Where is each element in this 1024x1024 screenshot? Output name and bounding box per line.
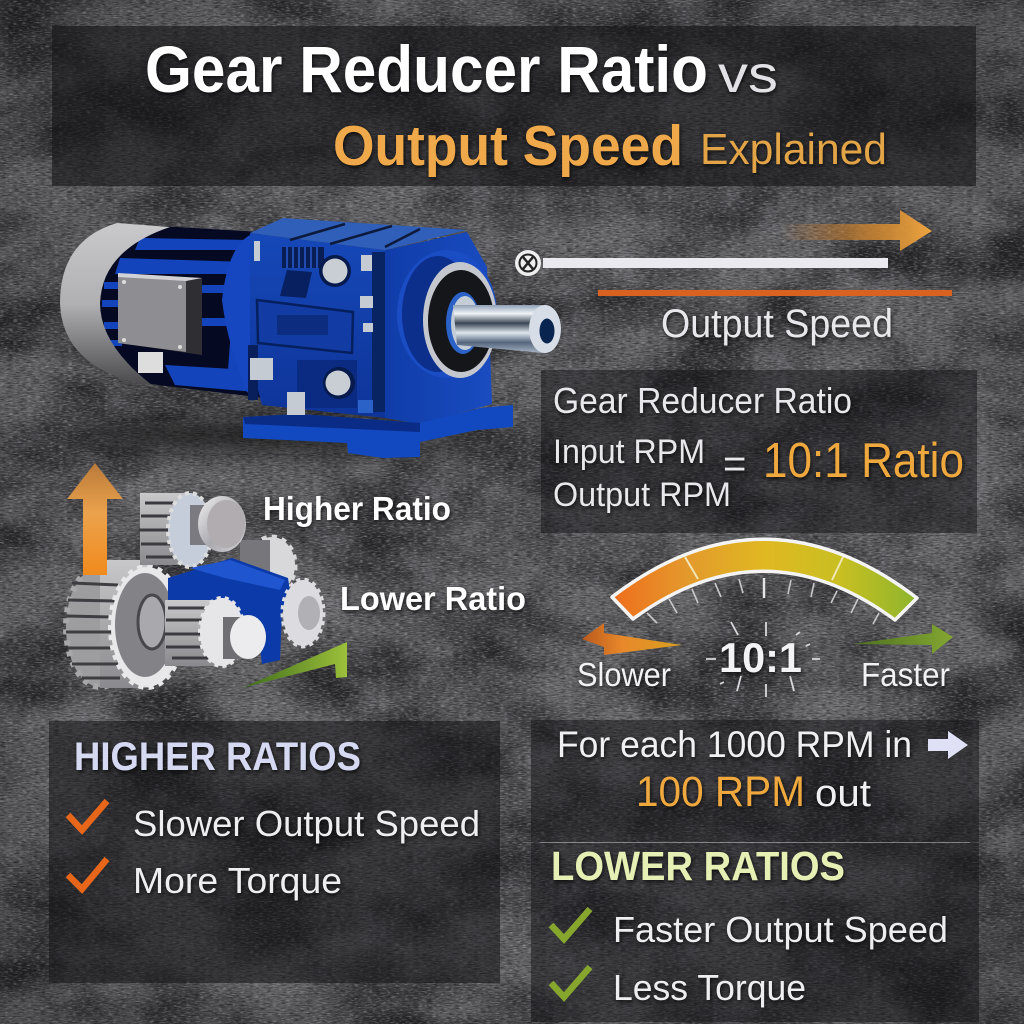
output flange: [397, 250, 497, 378]
text: faster output speed: Faster Output Speed: [613, 909, 948, 950]
front gear: [165, 598, 266, 666]
icon: orange check: [68, 859, 107, 889]
text: slower output speed: Slower Output Speed: [133, 803, 480, 844]
value: 10:1 ratio: 10:1 Ratio: [763, 434, 964, 488]
silver fan cover: [60, 223, 170, 385]
right gear: [283, 580, 323, 646]
heading: gear reducer ratio: Gear Reducer Ratio: [553, 380, 852, 421]
arrow: up orange: [67, 463, 123, 575]
panel: rpm example: [531, 720, 979, 842]
gauge: ratio speed dial: [577, 539, 953, 697]
heading: output speed explained: Explained: [700, 125, 887, 174]
gauge arc: [612, 539, 917, 620]
output speed indicator: [515, 210, 952, 346]
output shaft: [453, 305, 561, 353]
illustration: blue gear motor: [60, 218, 561, 458]
formula fraction: Output RPM: [553, 476, 731, 514]
icon: speed arrow: [780, 210, 932, 251]
text: 100 rpm out: out: [815, 773, 871, 815]
formula fraction: Input RPM: [553, 433, 705, 471]
heading: lower ratios: LOWER RATIOS: [551, 843, 845, 889]
side plate: [257, 300, 353, 353]
icon: green check: [551, 967, 590, 997]
text: more torque: More Torque: [133, 860, 342, 901]
label: faster: Faster: [861, 656, 950, 693]
top gear: [139, 493, 246, 567]
heading: output speed explained: [333, 114, 887, 178]
motor label: [138, 352, 163, 373]
panel: ratio formula: [541, 370, 977, 533]
icon: orange check: [68, 801, 107, 830]
label: lower ratio: Lower Ratio: [340, 580, 526, 617]
panel: lower ratios: [531, 842, 979, 1022]
illustration: gears with ratio arrows: [66, 463, 526, 688]
small fittings: [250, 241, 373, 415]
label: slower: Slower: [577, 656, 671, 693]
motor body: [100, 226, 264, 398]
large gear: [66, 560, 183, 688]
arrow: green wedge: [242, 642, 347, 688]
value: 10:1: 10:1: [719, 634, 802, 681]
terminal box: [118, 273, 202, 355]
orange speed line: [598, 290, 952, 296]
top vent: [282, 247, 324, 268]
arrow: faster: [853, 624, 953, 654]
formula fraction: [553, 433, 746, 514]
icon: green check: [551, 909, 590, 939]
formula fraction: =: [723, 442, 746, 486]
heading: higher ratios: HIGHER RATIOS: [74, 735, 361, 779]
panel: title: [52, 26, 976, 186]
heading: gear reducer ratio vs: Gear Reducer Ratio: [145, 32, 708, 106]
blue housing: [168, 558, 293, 664]
arrow: slower: [582, 623, 682, 655]
heading: output speed explained: Output Speed: [333, 114, 683, 178]
text: 100 rpm out: 100 RPM: [636, 768, 805, 816]
text: for each 1000 rpm in: For each 1000 RPM in: [557, 724, 912, 765]
text: less torque: Less Torque: [613, 967, 806, 1008]
icon: right arrow: [928, 731, 968, 759]
heading: gear reducer ratio vs: vs: [718, 46, 778, 104]
label: higher ratio: Higher Ratio: [263, 490, 451, 527]
gearbox housing: [222, 218, 513, 458]
bolts: [319, 255, 355, 399]
panel: higher ratios: [49, 721, 500, 983]
icon: shaft end marker: [515, 250, 541, 276]
label: output speed: Output Speed: [661, 302, 893, 346]
back gear: [240, 537, 295, 593]
white speed bar: [543, 258, 888, 268]
sunburst ticks: [706, 622, 820, 697]
